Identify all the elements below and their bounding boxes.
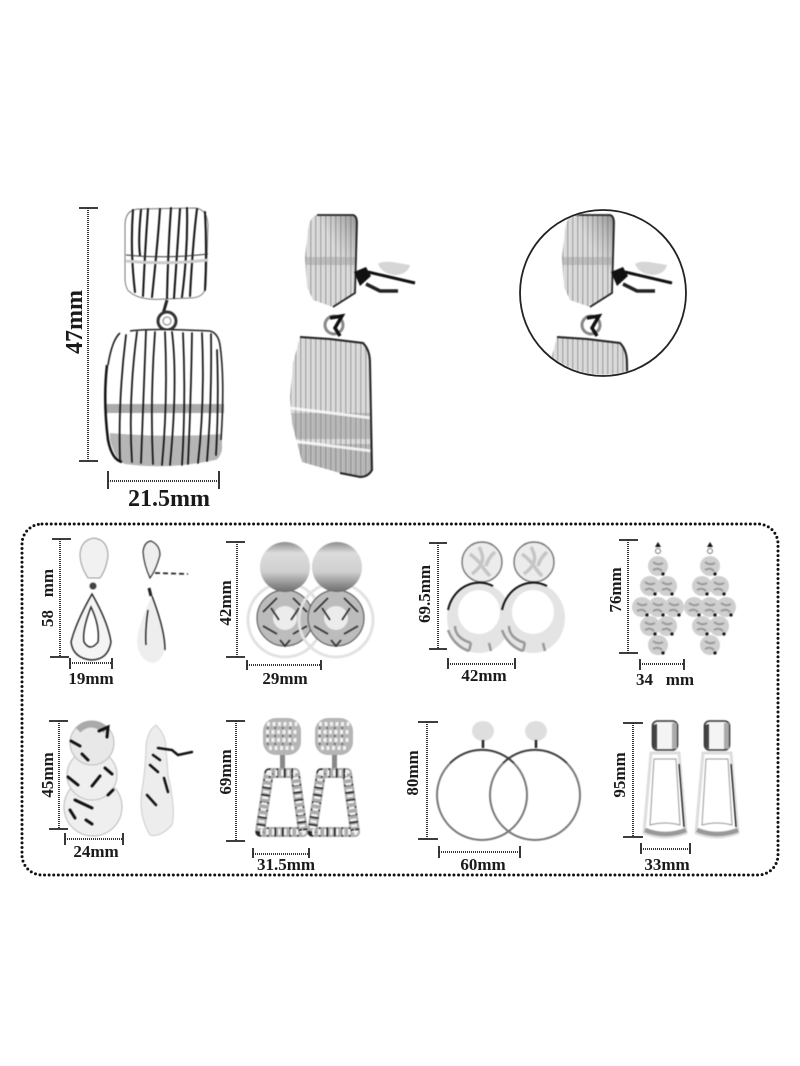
item: large hoop earring 80mm: 60mm <box>460 855 506 874</box>
dotted panel: size options <box>22 524 778 875</box>
item: hammered hoop earring 69.5mm: 42mm <box>461 666 507 685</box>
item: stacked disc earring 45mm <box>38 721 192 861</box>
item: large hoop earring 80mm <box>403 721 580 874</box>
dimension: 47mm <box>62 208 98 461</box>
item: hammered hoop earring 69.5mm: 69.5mm <box>415 565 434 623</box>
item: stacked disc earring 45mm: 24mm <box>73 842 119 861</box>
item: disc and gem earring 42mm: 29mm <box>262 669 308 688</box>
item: textured trapezoid earring 69mm: 31.5mm <box>257 855 315 874</box>
item: teardrop earring 58mm: 58 mm <box>38 569 57 627</box>
dimension: 21.5mm <box>108 471 219 512</box>
item: rectangle drop earring 95mm: 33mm <box>644 855 690 874</box>
magnified clasp circle <box>519 209 687 377</box>
top plate <box>125 208 208 299</box>
item: disc and gem earring 42mm: 42mm <box>216 580 235 626</box>
dimension: 47mm: 47mm <box>62 290 88 354</box>
item: diamond cluster earring 76mm <box>606 540 736 689</box>
item: diamond cluster earring 76mm: 76mm <box>606 567 625 613</box>
item: textured trapezoid earring 69mm: 69mm <box>216 749 235 795</box>
item: disc and gem earring 42mm <box>216 542 373 688</box>
item: hammered hoop earring 69.5mm <box>415 542 565 685</box>
main earring front view <box>105 208 224 466</box>
item: rectangle drop earring 95mm <box>610 721 738 874</box>
item: stacked disc earring 45mm: 45mm <box>38 752 57 798</box>
dimension: 21.5mm: 21.5mm <box>128 486 210 512</box>
item: teardrop earring 58mm <box>38 538 188 688</box>
item: textured trapezoid earring 69mm <box>216 718 355 874</box>
main earring side view <box>285 210 415 480</box>
item: teardrop earring 58mm: 19mm <box>68 669 114 688</box>
ring connector <box>158 300 176 330</box>
item: large hoop earring 80mm: 80mm <box>403 750 422 796</box>
item: diamond cluster earring 76mm: 34 mm <box>636 670 694 689</box>
bottom plate <box>105 330 224 466</box>
item: rectangle drop earring 95mm: 95mm <box>610 752 629 798</box>
